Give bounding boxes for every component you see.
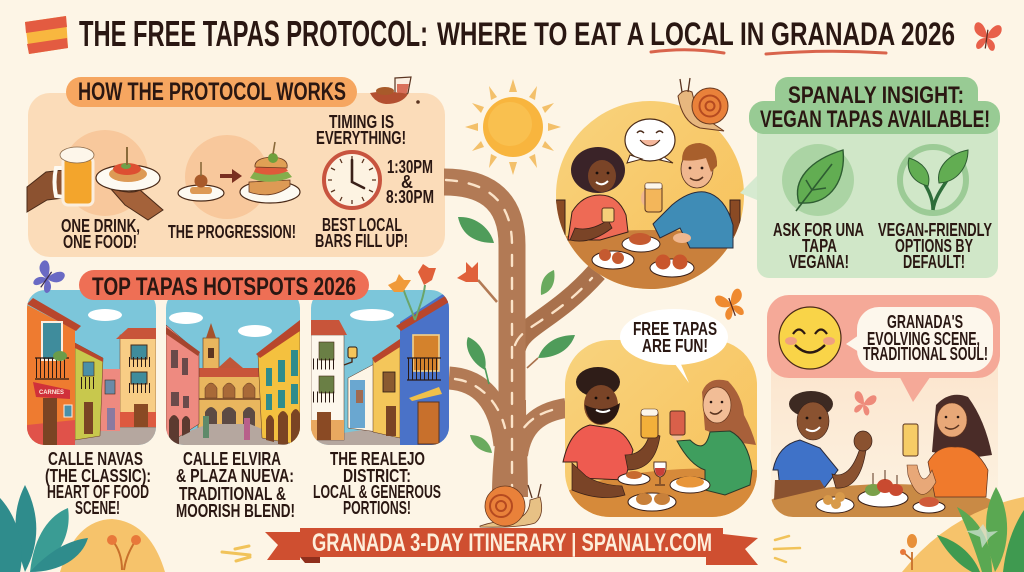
plates and wine — [618, 462, 710, 511]
title: THE FREE TAPAS PROTOCOL: — [79, 13, 428, 54]
text: realejo — [313, 449, 441, 518]
text: calle navas: SCENE! — [75, 498, 120, 518]
text: ask for una tapa vegana: TAPA — [802, 236, 837, 256]
text: vegan friendly — [878, 220, 992, 272]
card: calle elvira and plaza nueva — [166, 290, 300, 445]
text: calle elvira — [176, 449, 295, 521]
icon: leaf — [782, 144, 854, 216]
icon: spanish flag — [25, 16, 68, 54]
banner: itinerary ribbon — [265, 528, 758, 565]
icon: sprout — [900, 147, 968, 213]
icon: snail bottom — [480, 484, 542, 527]
icon: the progression — [178, 135, 300, 219]
text: times: & — [401, 172, 413, 192]
text: calle elvira: & PLAZA NUEVA: — [176, 466, 294, 486]
speech bubble: smile — [625, 119, 675, 163]
icon: clock — [324, 152, 380, 208]
decoration: bottom left foliage — [0, 485, 250, 572]
banner: itinerary ribbon: GRANADA 3-DAY ITINERARY | SPANALY.COM — [312, 529, 712, 557]
text: calle navas — [45, 449, 151, 518]
heading: how the protocol works — [66, 77, 357, 107]
decoration: bottom right foliage — [774, 487, 1024, 572]
title — [79, 13, 955, 54]
panel: evolving scene — [767, 295, 1000, 517]
figure: woman — [568, 147, 628, 241]
text: calle elvira: TRADITIONAL & — [179, 484, 286, 504]
icon: sun — [465, 79, 561, 175]
text: vegan friendly: DEFAULT! — [903, 252, 965, 272]
text: timing is everything — [316, 112, 406, 148]
speech bubble: free tapas are fun — [620, 309, 728, 383]
text: vegan friendly: OPTIONS BY — [895, 236, 973, 256]
figure: man in red — [563, 367, 660, 498]
text: times: 1:30PM — [387, 157, 433, 177]
text: one drink one food: ONE DRINK, — [61, 216, 140, 236]
figure: woman in orange — [903, 395, 992, 497]
heading: how the protocol works: HOW THE PROTOCOL WORKS — [78, 78, 346, 106]
panel: spanaly insight — [740, 77, 1000, 278]
text: realejo: PORTIONS! — [343, 498, 411, 518]
scene: couple at round table — [553, 101, 750, 289]
text: calle elvira: MOORISH BLEND! — [176, 501, 295, 521]
icon: one drink one food — [27, 130, 163, 220]
text: ask for una tapa vegana — [773, 220, 864, 272]
icon: smiley — [779, 307, 841, 369]
text: best local bars: BARS FILL UP! — [315, 231, 408, 251]
text: one drink one food — [61, 216, 140, 252]
text: timing is everything: EVERYTHING! — [316, 128, 406, 148]
text: one drink one food: ONE FOOD! — [63, 232, 137, 252]
text: timing is everything: TIMING IS — [329, 112, 394, 132]
text: ask for una tapa vegana: ASK FOR UNA — [773, 220, 864, 240]
leaves and flower on tree — [457, 217, 575, 453]
text: calle navas: HEART OF FOOD — [47, 482, 149, 502]
text: the progression: THE PROGRESSION! — [168, 222, 296, 242]
speech bubble: evolving scene — [846, 307, 993, 372]
text: realejo: THE REALEJO — [330, 449, 425, 469]
icon: pink butterfly — [850, 390, 877, 417]
scene: free tapas are fun — [563, 309, 757, 517]
text: calle navas: CALLE NAVAS — [48, 449, 143, 469]
panel: how the protocol works — [27, 77, 445, 257]
figure: man in blue — [773, 391, 872, 500]
text: ask for una tapa vegana: VEGANA! — [789, 252, 849, 272]
figure: man — [641, 143, 733, 248]
tree road — [444, 180, 597, 497]
text: times — [386, 157, 434, 207]
speech bubble: free tapas are fun: FREE TAPAS — [633, 319, 717, 339]
text: best local bars: BEST LOCAL — [322, 215, 402, 235]
icon: butterfly top right — [971, 22, 1002, 52]
card: calle navas street: CARNES — [39, 390, 64, 396]
speech bubble: evolving scene: GRANADA'S — [887, 312, 963, 332]
icon: purple butterfly — [29, 259, 66, 296]
text: realejo: LOCAL & GENEROUS — [313, 482, 441, 502]
text: best local bars — [315, 215, 408, 251]
panel: top tapas hotspots — [27, 259, 449, 521]
card: calle navas street — [27, 290, 156, 445]
speech bubble: free tapas are fun: ARE FUN! — [642, 336, 708, 356]
heading: spanaly insight — [749, 77, 1000, 134]
icon: snail top — [678, 78, 728, 131]
icon: tapas bowl and wine — [370, 77, 420, 104]
heading: top tapas hotspots: TOP TAPAS HOTSPOTS 2026 — [92, 273, 356, 301]
heading: spanaly insight: SPANALY INSIGHT: — [788, 82, 964, 109]
icon: tulips — [388, 264, 436, 320]
text: calle navas: (THE CLASSIC): — [45, 466, 151, 486]
text: realejo: DISTRICT: — [343, 466, 411, 486]
plates — [816, 470, 945, 513]
figure: woman in green — [670, 380, 756, 495]
plates — [592, 233, 694, 277]
text: times: 8:30PM — [386, 187, 434, 207]
icon: orange butterfly — [714, 288, 749, 322]
text: calle elvira: CALLE ELVIRA — [183, 449, 281, 469]
card: realejo district — [311, 290, 449, 445]
